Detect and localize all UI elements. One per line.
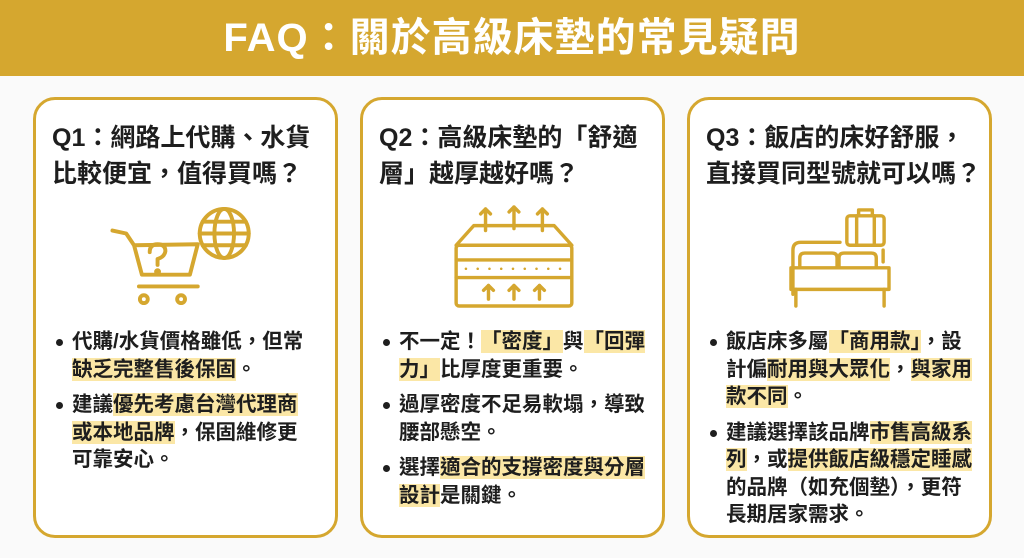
bullets: 或本地品牌，保固維修更 bbox=[72, 420, 298, 444]
question 2 bbox=[379, 124, 637, 188]
panel: Q3 bbox=[687, 97, 992, 538]
bullets: 建議選擇該品牌市售高級系 bbox=[726, 420, 972, 444]
bullets: 列，或提供飯店級穩定睡感 bbox=[726, 448, 972, 471]
bullets: 選擇適合的支撐密度與分層 bbox=[399, 456, 645, 479]
panel: Q2 bbox=[360, 97, 665, 538]
question 3: Q3：飯店的床好舒服， bbox=[706, 124, 964, 152]
bullets: 設計是關鍵。 bbox=[399, 484, 522, 506]
bullets: 計偏耐用與大眾化，與家用 bbox=[726, 358, 972, 380]
bullets: 過厚密度不足易軟塌，導致 bbox=[399, 393, 645, 416]
bullets: 缺乏完整售後保固。 bbox=[72, 358, 256, 380]
title bbox=[0, 0, 1024, 76]
question 2: 層」越厚越好嗎？ bbox=[379, 160, 579, 188]
question 1: 比較便宜，值得買嗎？ bbox=[52, 160, 302, 188]
question 3 bbox=[706, 124, 981, 188]
question 3: 直接買同型號就可以嗎？ bbox=[706, 160, 981, 188]
bullets: 建議優先考慮台灣代理商 bbox=[72, 393, 298, 416]
bullets: 款不同。 bbox=[726, 385, 808, 408]
bullets bbox=[56, 330, 303, 471]
question 1 bbox=[52, 124, 310, 188]
icon: bed with suitcase bbox=[789, 208, 891, 308]
bullets: 可靠安心。 bbox=[72, 448, 174, 471]
bullets: 的品牌（如充個墊），更符 bbox=[726, 476, 962, 498]
bullets: 長期居家需求。 bbox=[726, 503, 870, 526]
title: FAQ：關於高級床墊的常見疑問 bbox=[223, 16, 801, 60]
bullets: 代購/水貨價格雖低，但常 bbox=[72, 330, 303, 353]
bullets: 力」比厚度更重要。 bbox=[399, 358, 584, 380]
bullets: 飯店床多屬「商用款」，設 bbox=[726, 330, 962, 353]
question 2: Q2：高級床墊的「舒適 bbox=[379, 124, 637, 152]
icon: mattress layers bbox=[454, 205, 574, 308]
bullets: 腰部懸空。 bbox=[399, 420, 502, 444]
question 1: Q1：網路上代購、水貨 bbox=[52, 124, 310, 152]
panel: Q1 bbox=[33, 97, 338, 538]
bullets: 不一定！「密度」與「回彈 bbox=[399, 330, 645, 353]
icon: cart and globe bbox=[110, 207, 251, 305]
bullets bbox=[383, 330, 645, 507]
bullets bbox=[710, 330, 972, 526]
